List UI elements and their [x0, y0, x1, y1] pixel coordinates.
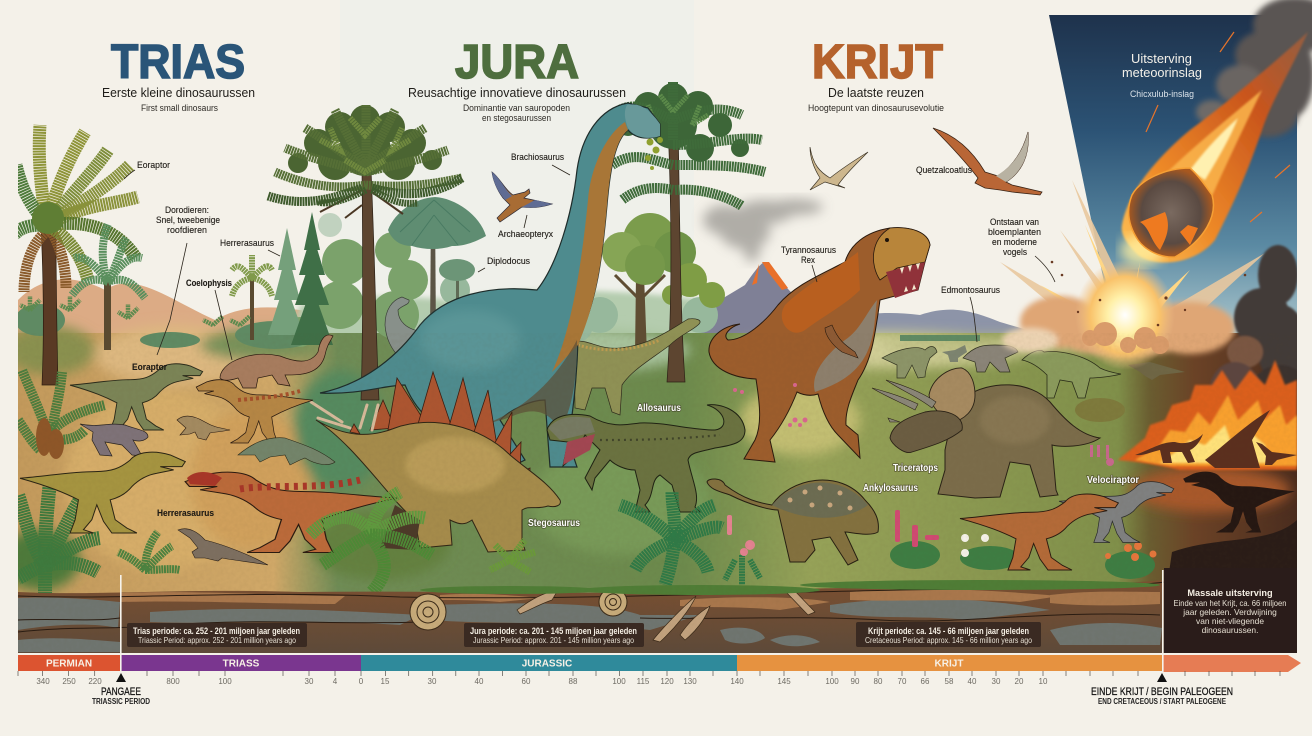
horns — [872, 380, 936, 422]
labels: species: Archaeopteryx — [498, 229, 553, 240]
dino: yellow theropod — [20, 452, 185, 533]
callout: Trias period: Trias periode: ca. 252 - 201 miljoen jaar geleden — [133, 626, 300, 636]
dino: Allosaurus — [547, 405, 745, 512]
labels: species: Triceratops — [893, 463, 938, 474]
dino: black silhouette — [1183, 472, 1295, 532]
distant mountain range — [810, 310, 1040, 340]
debris dots — [1051, 261, 1246, 326]
dino: green lizard — [238, 438, 335, 465]
timeline tick labels: 10 — [1039, 677, 1048, 686]
callout: mass extinction: dinosaurussen. — [1202, 625, 1258, 635]
open mouth — [886, 262, 925, 298]
marker: End Cretaceous — [1091, 673, 1233, 706]
dino: small pterosaur — [810, 147, 868, 190]
dino: Velociraptor grey — [1059, 482, 1174, 542]
era dividers — [120, 570, 1164, 675]
labels: species: Edmontosaurus — [941, 285, 1000, 296]
timeline tick labels: 115 — [637, 677, 650, 686]
labels: species: Tyrannosaurus — [781, 245, 836, 256]
timeline tick labels: 100 — [612, 677, 626, 686]
label: meteor title — [1122, 51, 1202, 100]
marker: End Cretaceous: END CRETACEOUS / START PALEOGENE — [1098, 697, 1227, 706]
glow — [1120, 234, 1164, 266]
small distant palms — [20, 296, 250, 325]
labels: species: en moderne — [992, 237, 1037, 248]
callout: Trias period: Triassic Period: approx. 252 - 201 million years ago — [138, 635, 296, 645]
haze: Jura forest — [290, 291, 715, 345]
timeline tick labels: 66 — [921, 677, 930, 686]
strata band — [18, 580, 1165, 653]
callout: Jura period: Jurassic Period: approx. 201 - 145 million years ago — [473, 635, 634, 645]
segment: Krijt — [737, 655, 1162, 671]
panel: meteor sky — [1049, 15, 1297, 345]
dino: small tan — [177, 416, 230, 440]
dino: Ankylosaurus — [707, 479, 878, 565]
timeline tick labels: 40 — [475, 677, 484, 686]
silhouettes in fire — [1135, 410, 1297, 468]
label: meteor title: meteoorinslag — [1122, 65, 1202, 80]
labels: species: Allosaurus — [637, 403, 681, 414]
labels: species: Herrerasaurus — [157, 508, 214, 519]
tree: large araucaria — [268, 105, 462, 400]
neck stripe — [552, 122, 628, 372]
fireball — [1075, 260, 1175, 370]
mane — [782, 252, 860, 333]
timeline tick labels: 88 — [569, 677, 578, 686]
dino: Coelophysis orange — [196, 380, 313, 443]
light tufts — [640, 95, 708, 125]
marker: Pangaee: PANGAEE — [101, 686, 141, 698]
labels: species: bloemplanten — [988, 227, 1041, 238]
mid forest cluster — [285, 232, 428, 347]
dino: Diplodocus background — [385, 297, 425, 358]
foliage mass — [288, 105, 442, 180]
heading: Jura: JURA — [455, 36, 579, 89]
segment: Permian — [18, 655, 120, 671]
segment: Krijt: KRIJT — [935, 658, 963, 670]
segment: Paleogene arrow — [1163, 655, 1301, 672]
timeline tick labels: 90 — [851, 677, 860, 686]
bright rays — [1040, 225, 1190, 340]
labels: species: vogels — [1003, 247, 1027, 258]
labels: species: Ankylosaurus — [863, 483, 918, 494]
timeline tick labels: 100 — [825, 677, 839, 686]
fern small — [490, 540, 535, 572]
segment: Triass: TRIASS — [223, 658, 260, 670]
hills: Trias desert — [18, 279, 330, 345]
labels: species: Coelophysis — [186, 278, 232, 289]
heading: Krijt — [808, 36, 944, 113]
callout: mass extinction: Massale uitsterving — [1187, 588, 1273, 598]
dino: T. rex — [709, 228, 930, 462]
heading: Jura: Dominantie van sauropoden — [463, 103, 570, 113]
rays — [1000, 180, 1265, 345]
arm — [825, 325, 858, 358]
trees: narrow conifers — [268, 212, 333, 345]
callout: Krijt period: Cretaceous Period: approx. 145 - 66 million years ago — [865, 635, 1032, 645]
timeline tick labels: 58 — [945, 677, 954, 686]
timeline tick labels: 30 — [992, 677, 1001, 686]
wildfire — [1118, 360, 1297, 470]
dino: Herrerasaurus red — [185, 472, 397, 552]
meteor — [1120, 32, 1308, 266]
tree: small palm — [232, 255, 272, 340]
belly — [814, 300, 877, 392]
small tree — [456, 272, 459, 332]
bare branches — [320, 190, 403, 218]
fronds — [268, 105, 462, 203]
grey rock layers — [18, 597, 1162, 652]
labels: species: Brachiosaurus — [511, 152, 564, 163]
ferns and cycad left — [18, 370, 180, 596]
timeline tick labels: 70 — [898, 677, 907, 686]
labels: species: Velociraptor — [1087, 475, 1139, 486]
dark cracks — [18, 582, 1165, 632]
heading: Trias: Eerste kleine dinosaurussen — [102, 86, 255, 100]
tree: right araucaria — [612, 82, 765, 382]
marker: Pangaee: TRIASSIC PERIOD — [92, 697, 150, 706]
background: distant landscape — [18, 199, 1040, 345]
volcano — [700, 262, 835, 340]
timeline tick labels: 800 — [166, 677, 180, 686]
tree: main palm — [14, 125, 138, 385]
label: meteor title: Chicxulub-inslag — [1130, 89, 1194, 100]
plates — [350, 372, 530, 485]
heading: Jura: en stegosaurussen — [482, 113, 551, 123]
labels: species: Quetzalcoatlus — [916, 165, 972, 176]
timeline tick labels: 130 — [683, 677, 697, 686]
timeline tick labels: 80 — [874, 677, 883, 686]
labels: species: Diplodocus — [487, 256, 530, 267]
timeline tick labels: 60 — [522, 677, 531, 686]
timeline tick labels: 40 — [968, 677, 977, 686]
timeline tick labels: 4 — [333, 677, 338, 686]
label: meteor title: Uitsterving — [1131, 51, 1192, 66]
timeline tick labels: 250 — [62, 677, 76, 686]
tree: conifer blue-green — [388, 197, 486, 340]
plant: pink flowers — [725, 515, 760, 585]
pale tree line — [318, 213, 718, 343]
marker: End Cretaceous: EINDE KRIJT / BEGIN PALEOGEEN — [1091, 686, 1233, 698]
dark lower ground — [1165, 520, 1297, 600]
dino: Quetzalcoatlus — [933, 128, 1042, 195]
distant forest — [15, 213, 980, 355]
round tree — [602, 213, 696, 355]
heading: Jura — [408, 36, 626, 123]
dino: Triceratops — [872, 368, 1100, 498]
heading: Trias: First small dinosaurs — [141, 103, 218, 113]
dino: small sauropod — [569, 319, 700, 415]
volcano smoke — [703, 199, 823, 262]
leader lines — [124, 165, 1055, 360]
timeline tick labels: 120 — [660, 677, 674, 686]
dino: Brachiosaurus — [320, 103, 663, 472]
ground patches — [0, 325, 1290, 590]
head — [890, 411, 962, 453]
labels: species: Rex — [801, 255, 815, 266]
heading: Trias: TRIAS — [111, 36, 245, 89]
fossil bones — [517, 588, 815, 642]
rock — [1129, 168, 1213, 257]
dino: brown quadruped — [220, 335, 333, 388]
ground burst — [1082, 322, 1169, 354]
heading: Krijt: KRIJT — [812, 36, 943, 89]
burnt stump — [1205, 410, 1270, 468]
timeline tick labels: 220 — [88, 677, 102, 686]
callout: mass extinction: Einde van het Krijt, ca. 66 miljoen — [1174, 598, 1287, 608]
timeline bar — [18, 655, 1301, 672]
heading: Krijt: Hoogtepunt van dinosaurusevolutie — [808, 103, 944, 113]
timeline tick labels — [36, 677, 1048, 686]
callout: mass extinction: jaar geleden. Verdwijning — [1182, 607, 1277, 617]
timeline tick labels: 30 — [428, 677, 437, 686]
tan rock layers — [120, 589, 1160, 610]
labels: species: Eoraptor — [132, 362, 167, 373]
labels: species: Stegosaurus — [528, 518, 580, 529]
timeline tick labels: 140 — [730, 677, 744, 686]
leaves in mouth — [645, 137, 663, 170]
ammonites — [410, 588, 627, 630]
dino: Edmontosaurus herd — [882, 345, 1185, 398]
heading: Trias — [102, 36, 255, 113]
fern: Stegosaurus foreground — [310, 492, 432, 592]
marker: Pangaee — [92, 673, 150, 706]
segment: Triass — [121, 655, 361, 671]
callout: Jura period — [464, 623, 644, 647]
small silhouette — [1256, 442, 1297, 465]
heading: Krijt: De laatste reuzen — [828, 86, 924, 100]
timeline tick labels: 145 — [777, 677, 791, 686]
timeline tick labels: 30 — [305, 677, 314, 686]
smoke: meteor trail — [1196, 0, 1312, 137]
labels: species: Herrerasaurus — [220, 238, 274, 249]
explosion — [1000, 180, 1265, 370]
timeline tick labels: 0 — [359, 677, 364, 686]
dino: Eoraptor — [70, 364, 203, 430]
head — [625, 104, 660, 138]
meadow flowers — [733, 383, 1156, 579]
texture overlay — [18, 333, 1297, 653]
callout: Jura period: Jura periode: ca. 201 - 145 miljoen jaar geleden — [470, 626, 637, 636]
lava stream — [752, 262, 788, 290]
callout: Trias period — [127, 623, 307, 647]
callout: mass extinction: van niet-vliegende — [1196, 616, 1264, 626]
light tufts — [320, 118, 410, 172]
dino: Stegosaurus — [311, 372, 560, 552]
callout: Krijt period: Krijt periode: ca. 145 - 66 miljoen jaar geleden — [868, 626, 1029, 636]
burning sauropod — [1135, 434, 1203, 463]
head — [873, 228, 930, 280]
labels: species: Snel, tweebenige — [156, 215, 220, 226]
dino: grey mammal-like reptile — [80, 424, 148, 456]
body shading — [470, 340, 577, 430]
flame tail — [1122, 32, 1308, 263]
rock lava — [1140, 212, 1198, 250]
panel: Jura backdrop — [340, 0, 694, 330]
dino: bottom lizard — [178, 529, 268, 565]
tree: second palm — [72, 224, 145, 350]
smoke: right column — [1189, 245, 1310, 430]
fern: centre foreground — [620, 492, 722, 585]
labels: species: Eoraptor — [137, 160, 170, 171]
labels: species — [132, 152, 1139, 529]
timeline tick labels: 15 — [381, 677, 390, 686]
ground cover along strata — [420, 580, 1160, 595]
timeline tick labels: 100 — [218, 677, 232, 686]
segment: Jurassic — [361, 655, 737, 671]
labels: species: Ontstaan van — [990, 217, 1039, 228]
tail spikes — [311, 402, 378, 430]
side masks keeping the scene inside its frame — [0, 120, 1312, 656]
heading: Jura: Reusachtige innovatieve dinosaurussen — [408, 86, 626, 100]
sparks — [1146, 32, 1290, 222]
callout: mass extinction — [1164, 568, 1297, 653]
segment: Jurassic: JURASSIC — [522, 658, 572, 670]
segment: Permian: PERMIAN — [46, 658, 92, 670]
timeline tick labels: 20 — [1015, 677, 1024, 686]
dino: Velociraptor orange — [960, 494, 1118, 570]
frill — [929, 368, 975, 423]
timeline ticks — [18, 671, 1280, 676]
labels: species: Dorodieren: — [165, 205, 209, 216]
dust cloud — [1002, 296, 1235, 356]
timeline tick labels: 340 — [36, 677, 50, 686]
mouth — [563, 434, 595, 465]
callout: Krijt period — [856, 622, 1041, 647]
labels: species: roofdieren — [167, 225, 207, 236]
bird: Archaeopteryx — [492, 172, 552, 222]
ground: full scene — [18, 333, 1297, 595]
